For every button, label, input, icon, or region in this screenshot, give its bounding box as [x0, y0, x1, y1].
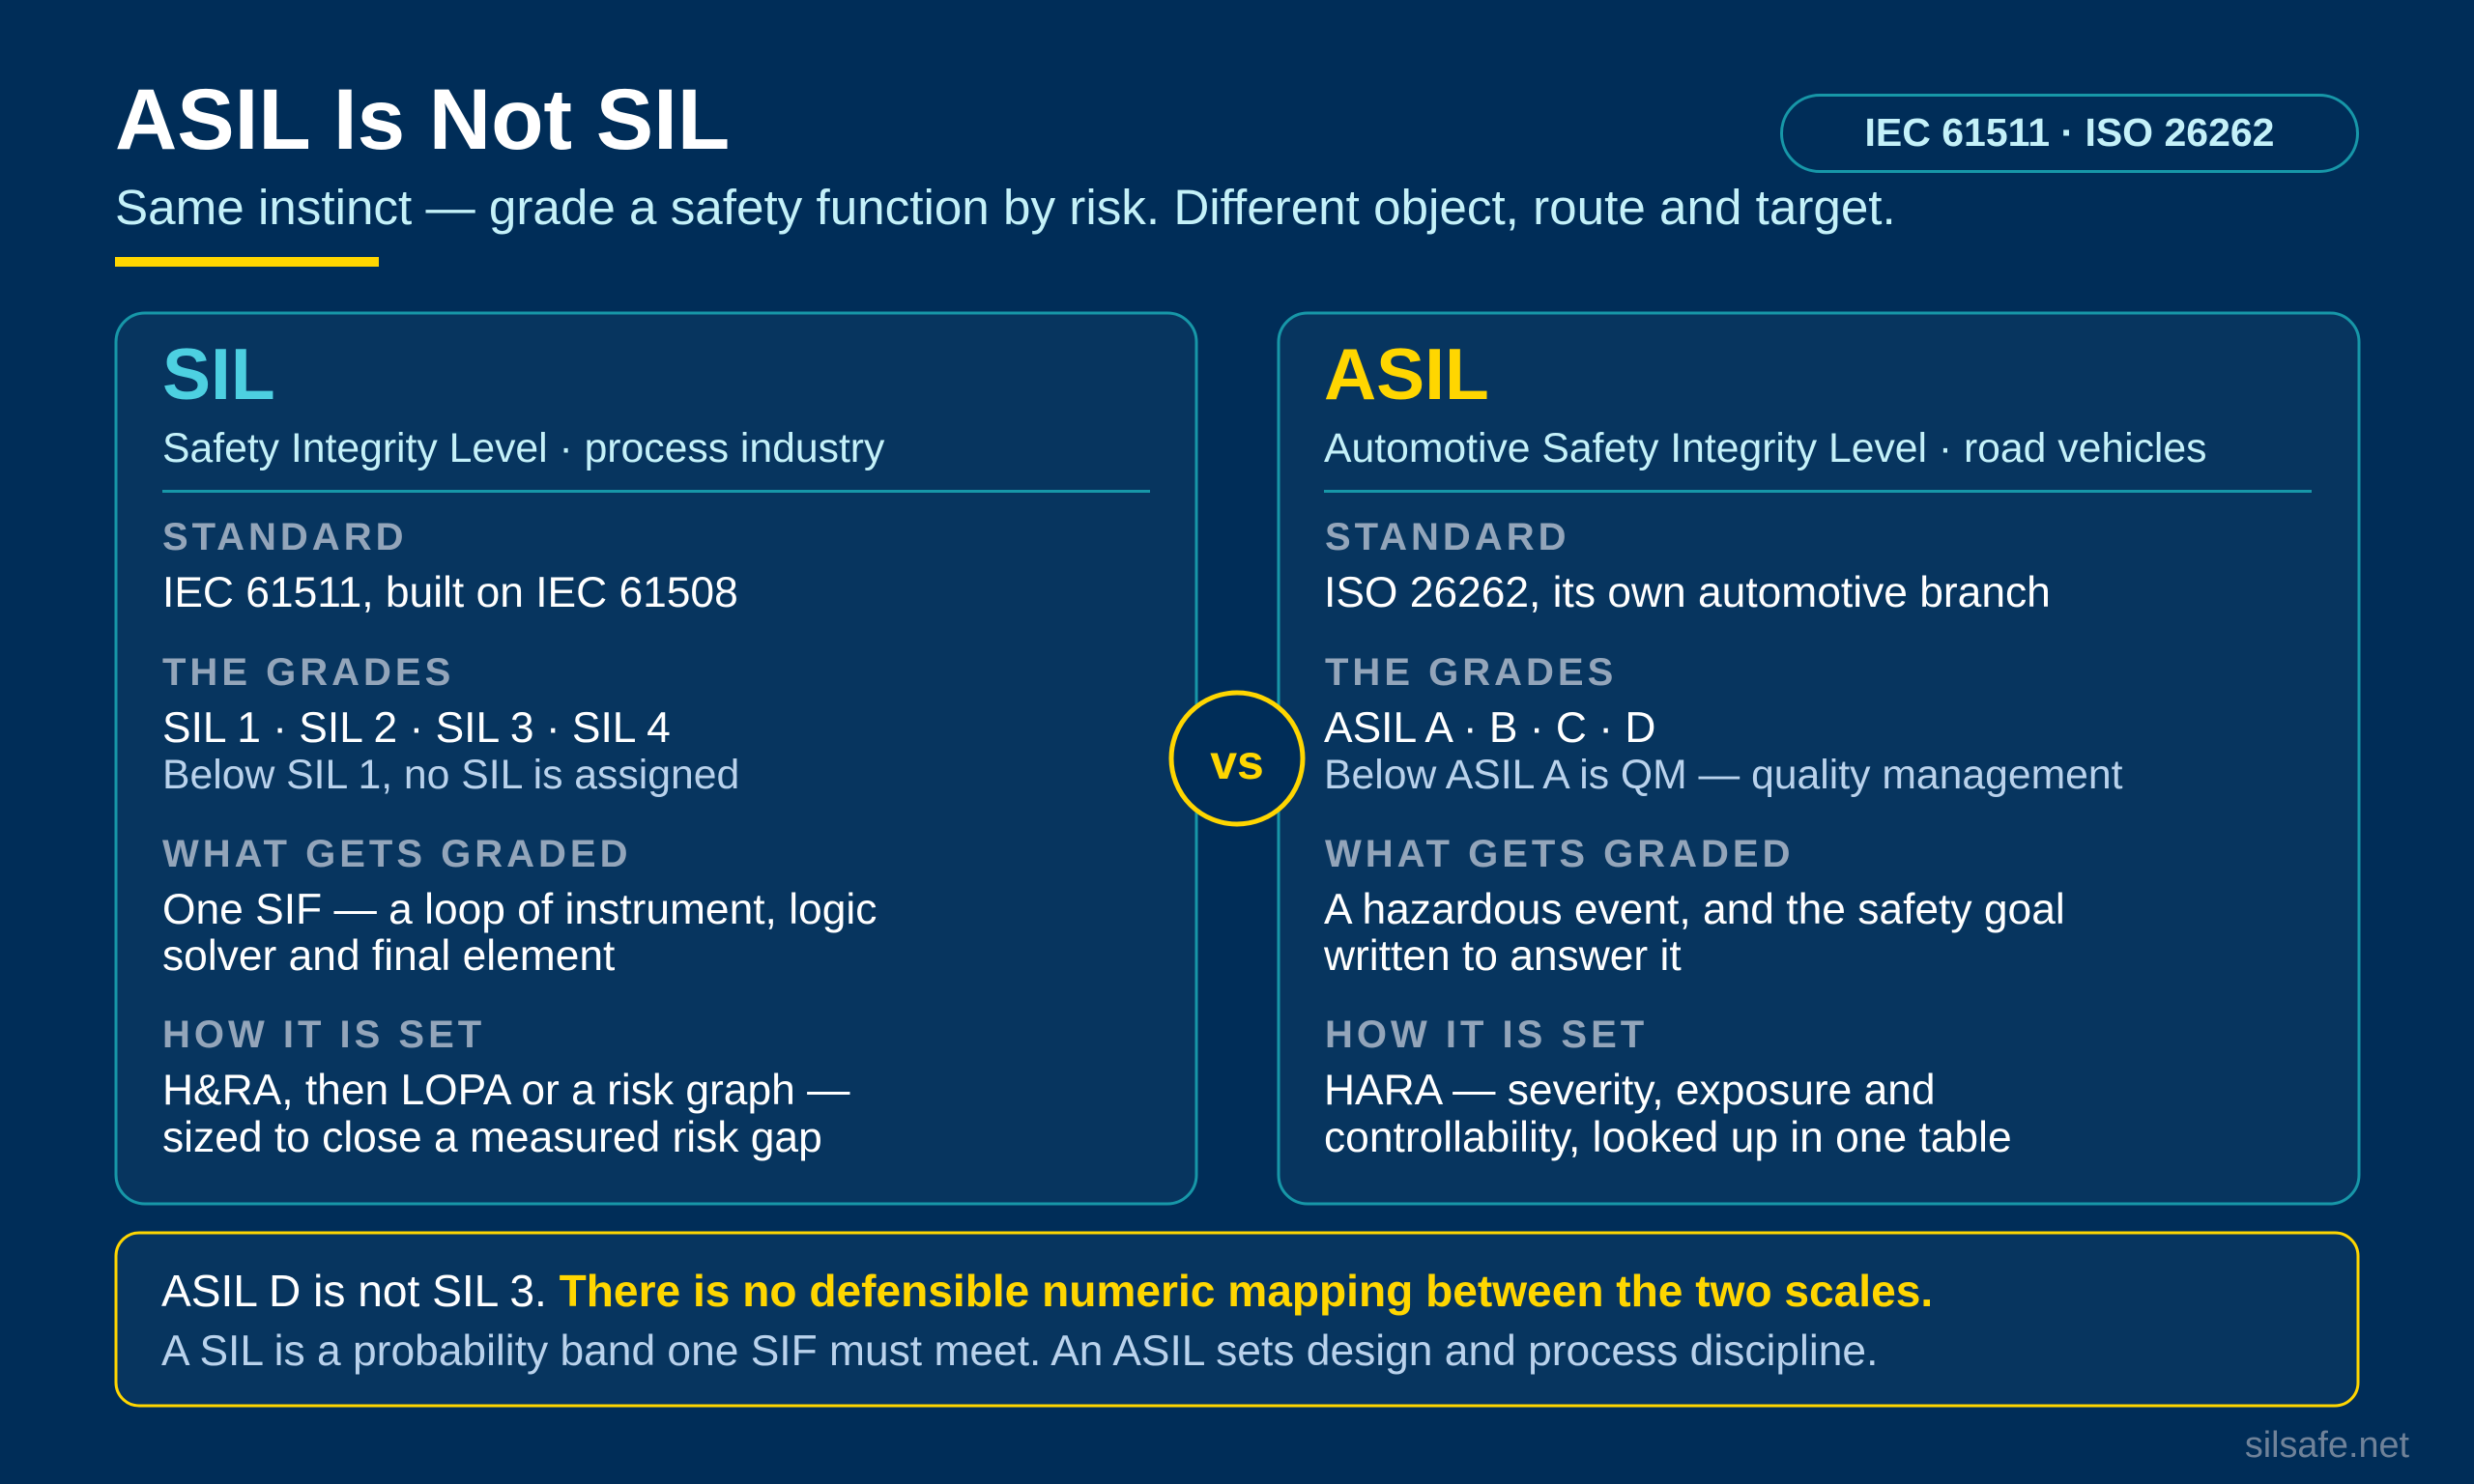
- ASIL subheading: Automotive Safety Integrity Level · road vehicles: [1324, 425, 2207, 471]
- SIL standard row: [162, 516, 738, 616]
- SIL what gets graded row: solver and final element: [162, 932, 615, 980]
- SIL how it is set row: HOW IT IS SET: [162, 1013, 485, 1056]
- ASIL how it is set row: [1324, 1013, 2012, 1161]
- badge: standards: [1782, 95, 2358, 172]
- ASIL heading: ASIL: [1324, 333, 1489, 414]
- accent bar: [115, 257, 379, 267]
- ASIL grades row: Below ASIL A is QM — quality management: [1324, 752, 2123, 798]
- vs badge: [1171, 693, 1303, 824]
- footer credit: silsafe.net: [2245, 1425, 2409, 1466]
- SIL grades row: Below SIL 1, no SIL is assigned: [162, 752, 739, 798]
- ASIL standard row: [1324, 516, 2051, 616]
- SIL grades row: THE GRADES: [162, 651, 454, 694]
- ASIL standard row: STANDARD: [1325, 516, 1569, 558]
- callout detail: A SIL is a probability band one SIF must meet. An ASIL sets design and process discipline.: [161, 1327, 1878, 1375]
- ASIL how it is set row: HOW IT IS SET: [1325, 1013, 1648, 1056]
- panel: ASIL: [1279, 313, 2359, 1204]
- SIL what gets graded row: WHAT GETS GRADED: [162, 833, 631, 875]
- title: ASIL Is Not SIL: [115, 71, 730, 167]
- subtitle: Same instinct — grade a safety function by risk. Different object, route and target.: [115, 180, 1896, 235]
- SIL what gets graded row: [162, 833, 877, 980]
- ASIL how it is set row: HARA — severity, exposure and: [1324, 1067, 1936, 1114]
- ASIL what gets graded row: written to answer it: [1323, 932, 1682, 980]
- ASIL standard row: ISO 26262, its own automotive branch: [1324, 569, 2051, 616]
- panel: SIL: [116, 313, 1196, 1204]
- ASIL grades row: ASIL A · B · C · D: [1324, 704, 1655, 752]
- SIL how it is set row: [162, 1013, 850, 1161]
- SIL standard row: IEC 61511, built on IEC 61508: [162, 569, 738, 616]
- SIL grades row: SIL 1 · SIL 2 · SIL 3 · SIL 4: [162, 704, 671, 752]
- SIL what gets graded row: One SIF — a loop of instrument, logic: [162, 886, 877, 933]
- SIL subheading: Safety Integrity Level · process industry: [162, 425, 885, 471]
- vs badge: vs: [1210, 735, 1264, 789]
- ASIL what gets graded row: [1323, 833, 2065, 980]
- callout: [116, 1233, 2358, 1406]
- SIL how it is set row: H&RA, then LOPA or a risk graph —: [162, 1067, 850, 1114]
- SIL grades row: [162, 651, 739, 798]
- ASIL what gets graded row: A hazardous event, and the safety goal: [1324, 886, 2065, 933]
- SIL heading: SIL: [162, 333, 275, 414]
- callout headline: ASIL D is not SIL 3. There is no defensible numeric mapping between the two scales.: [161, 1266, 1933, 1316]
- SIL standard row: STANDARD: [162, 516, 407, 558]
- ASIL how it is set row: controllability, looked up in one table: [1324, 1114, 2012, 1161]
- ASIL grades row: [1324, 651, 2123, 798]
- badge: standards: IEC 61511 · ISO 26262: [1865, 110, 2274, 155]
- ASIL grades row: THE GRADES: [1325, 651, 1617, 694]
- SIL how it is set row: sized to close a measured risk gap: [162, 1114, 822, 1161]
- ASIL what gets graded row: WHAT GETS GRADED: [1325, 833, 1794, 875]
